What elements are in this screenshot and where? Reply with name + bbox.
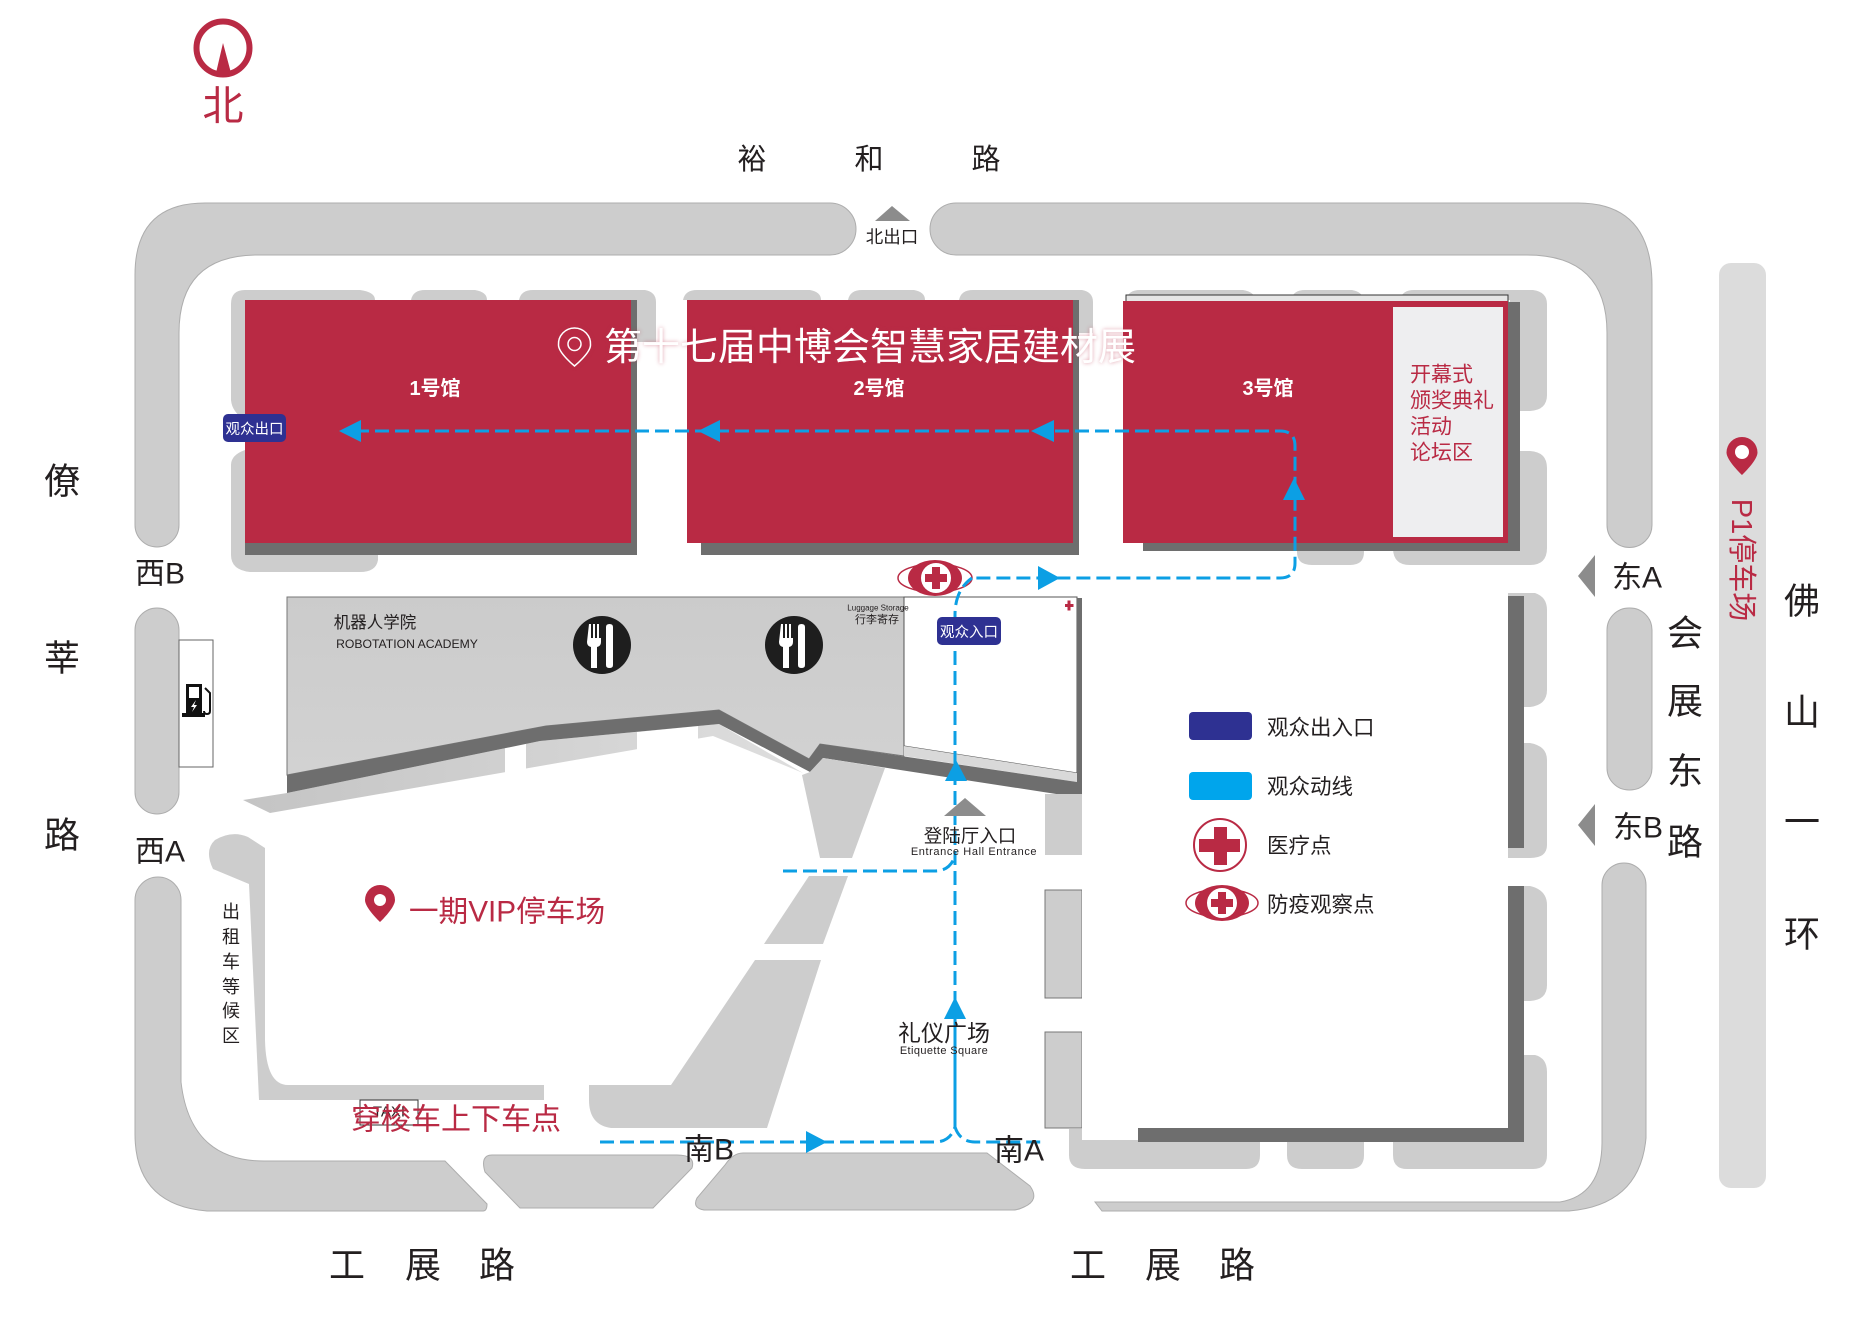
hall 3: 3号馆: [1242, 377, 1294, 400]
gate label: south A: 南A: [994, 1134, 1044, 1168]
etiquette square label: 礼仪广场: [898, 1020, 990, 1046]
road: north road label: [737, 143, 1001, 176]
east hall white body: [1082, 597, 1508, 1128]
north exit: 北出口: [866, 227, 918, 247]
south road label left: 展: [405, 1244, 441, 1286]
road: east middle: [1607, 608, 1652, 790]
south road label left: [329, 1244, 515, 1286]
west road label: 莘: [44, 638, 80, 678]
west road label: 僚: [44, 460, 80, 502]
luggage storage label: [847, 604, 909, 626]
gate label: west A: 西A: [135, 836, 185, 868]
academy label: [334, 613, 478, 651]
west road label: 路: [44, 814, 80, 856]
legend: medical point: [1194, 819, 1332, 871]
academy label: 机器人学院: [334, 613, 416, 632]
legend: epidemic checkpoint: [1186, 885, 1375, 921]
legend: visitor flow: [1189, 772, 1353, 800]
building lower wedge: [243, 724, 803, 813]
gate label: west B: 西B: [135, 558, 185, 590]
north exit: [866, 206, 918, 247]
east road label: [1667, 612, 1703, 862]
ceremony area label: 活动: [1410, 416, 1452, 438]
south road label left: 路: [479, 1244, 515, 1286]
gate label: south B: 南B: [684, 1134, 734, 1166]
ceremony area label: 论坛区: [1410, 442, 1473, 464]
road: perimeter top left: [135, 203, 856, 547]
taxi waiting label: 车: [222, 952, 240, 972]
VIP parking label: 一期VIP停车场: [409, 896, 605, 928]
east hall blocks: [1045, 593, 1547, 1169]
white entrance room: [904, 597, 1077, 782]
taxi waiting label: 等: [222, 977, 240, 997]
east road label: 东: [1667, 750, 1703, 792]
gate: east A: [1578, 555, 1662, 597]
legend: entrance and exit: [1189, 712, 1375, 740]
road: south middle: [484, 1155, 693, 1208]
flow line: [355, 431, 1295, 1142]
road: south third: [696, 1153, 1034, 1210]
taxi sign: TAXI: [373, 1104, 405, 1120]
academy label: ROBOTATION ACADEMY: [336, 637, 478, 651]
luggage storage label: Luggage Storage: [847, 604, 909, 612]
road: north road label: 路: [971, 143, 1001, 176]
taxi waiting label: 候: [222, 1001, 240, 1021]
taxi waiting label: 出: [222, 902, 240, 922]
road: north road label: 裕: [737, 143, 767, 176]
legend: [1186, 712, 1375, 921]
charging station: [179, 640, 213, 767]
ceremony area label: [1410, 364, 1494, 464]
hall 3: [1123, 295, 1520, 551]
east road label: 会: [1667, 612, 1703, 654]
ceremony area label: 开幕式: [1410, 364, 1473, 386]
ring road label: 佛: [1784, 580, 1820, 622]
icon: restaurant 2: [765, 616, 823, 674]
exit badge: 观众出口: [226, 421, 284, 438]
VIP parking label: [365, 885, 605, 928]
building dark band: [287, 598, 1082, 798]
hall 1: 1号馆: [409, 377, 461, 400]
wedge gaps: [505, 726, 698, 774]
taxi waiting label: 区: [222, 1026, 240, 1046]
legend: visitor flow: 观众动线: [1267, 775, 1353, 799]
P1 parking label: [1725, 437, 1758, 621]
south road label left: 工: [329, 1244, 365, 1286]
taxi waiting label: [222, 902, 240, 1046]
south road label right: 展: [1145, 1244, 1181, 1286]
east hall walls: [1138, 596, 1524, 1142]
hall 2: [687, 300, 1079, 555]
south road label right: 工: [1070, 1244, 1106, 1286]
west road label: [44, 460, 80, 856]
ring road label: 环: [1784, 914, 1820, 954]
south road label right: 路: [1219, 1244, 1255, 1286]
taxi waiting label: 租: [222, 927, 240, 947]
south road label right: [1070, 1244, 1255, 1286]
entrance badge: 观众入口: [940, 624, 998, 641]
legend: epidemic checkpoint: 防疫观察点: [1267, 893, 1375, 917]
robot academy building: [287, 597, 904, 775]
flow arrows: [339, 420, 1305, 1153]
road: south east: [1095, 863, 1646, 1211]
east hall notch: [1082, 1128, 1138, 1140]
P1 parking label: P1停车场: [1725, 499, 1758, 621]
legend: entrance and exit: 观众出入口: [1267, 716, 1375, 740]
main title: 第十七届中博会智慧家居建材展: [604, 327, 1136, 369]
shuttle stop label: 穿梭车上下车点: [351, 1104, 561, 1136]
pads around hall 1: [231, 290, 656, 572]
road: perimeter top right: [930, 203, 1652, 548]
hall 1: [245, 300, 637, 555]
gate: east B: [1578, 804, 1663, 846]
luggage storage label: 行李寄存: [855, 612, 899, 626]
gate: east A: 东A: [1612, 562, 1662, 594]
taxi rank island: [209, 834, 544, 1100]
east road label: 展: [1667, 680, 1703, 722]
road: west lower and south: [135, 877, 487, 1211]
icon: epidemic checkpoint: [898, 560, 972, 596]
etiquette square label: Etiquette Square: [900, 1045, 988, 1057]
exit badge: [223, 414, 286, 442]
ring road label: 一: [1784, 802, 1820, 842]
hall 2: 2号馆: [853, 377, 905, 400]
compass: north: [196, 22, 250, 129]
road: P1 access: [1719, 263, 1766, 1188]
road: north road label: 和: [854, 144, 884, 176]
east road label: 路: [1667, 822, 1703, 862]
ring road label: 山: [1784, 692, 1820, 732]
gate: east B: 东B: [1613, 812, 1663, 844]
entrance hall label: [911, 798, 1037, 858]
entrance badge: [937, 617, 1001, 645]
entrance hall label: 登陆厅入口: [924, 826, 1016, 846]
compass: north: 北: [202, 83, 244, 129]
pads around hall 2: [683, 290, 1093, 333]
taxi sign: [360, 1100, 418, 1125]
icon: restaurant 1: [573, 616, 631, 674]
pads around hall 3: [1126, 290, 1547, 565]
ceremony area label: 颁奖典礼: [1410, 390, 1494, 412]
legend: medical point: 医疗点: [1267, 834, 1332, 858]
road: west middle: [135, 608, 179, 814]
funnel plaza shapes: [589, 758, 885, 1128]
ring road label: [1784, 580, 1820, 954]
entrance hall label: Entrance Hall Entrance: [911, 846, 1037, 858]
